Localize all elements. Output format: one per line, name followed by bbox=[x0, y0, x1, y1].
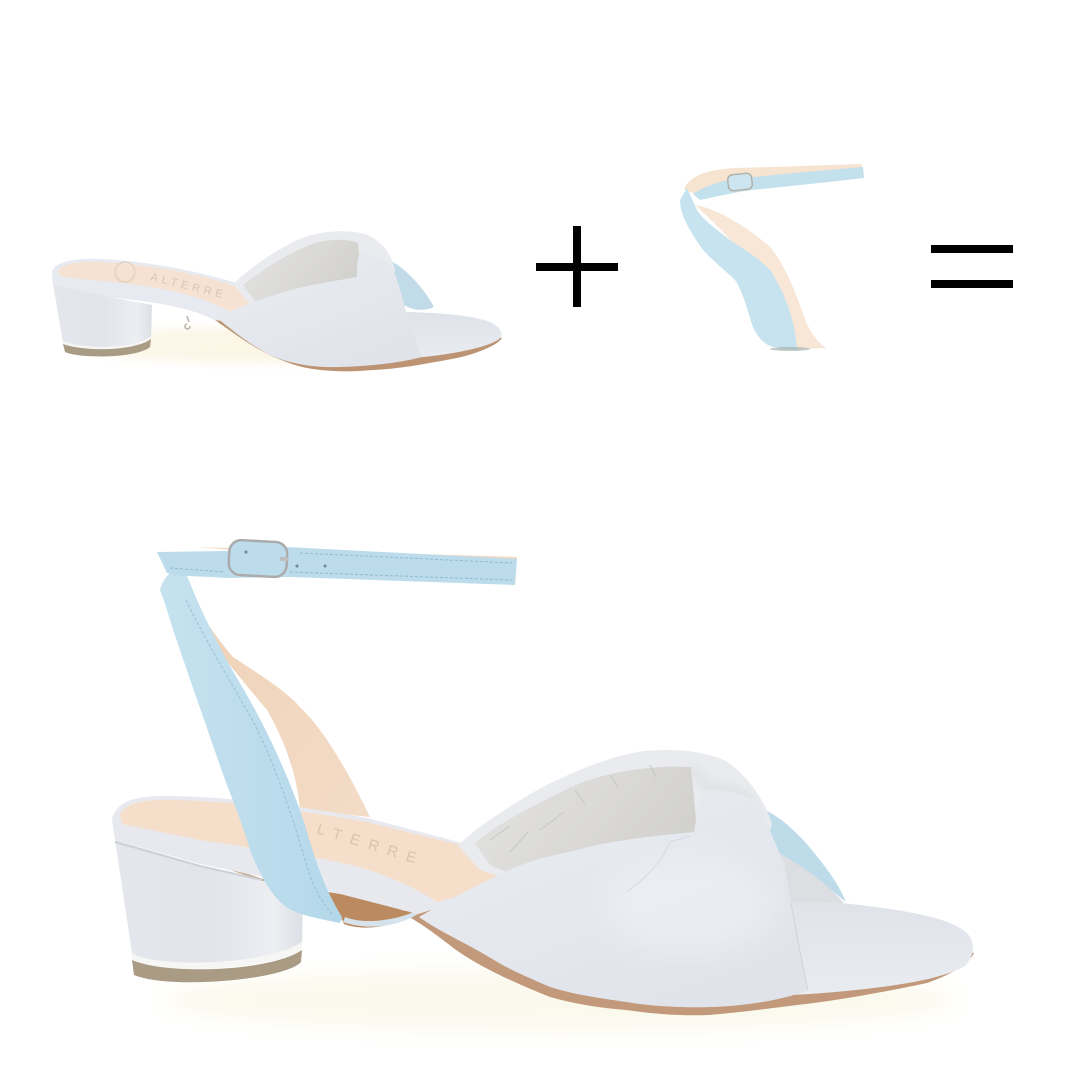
lining interior bbox=[243, 240, 362, 305]
small ankle strap piece bbox=[680, 164, 864, 351]
blue vertical strap bbox=[160, 568, 342, 923]
toe footbed bbox=[395, 312, 502, 360]
ground shadow bbox=[160, 968, 960, 1032]
heel underside edge bbox=[212, 863, 310, 880]
strap buckle bbox=[727, 173, 753, 191]
buckle bbox=[228, 540, 325, 578]
platform band bbox=[52, 259, 300, 325]
ground shadow bbox=[80, 327, 460, 363]
equation: equals sign bbox=[931, 245, 1013, 288]
insole bbox=[120, 800, 540, 902]
knot shading on rim bbox=[691, 767, 752, 800]
strap body bbox=[680, 188, 797, 350]
heel tip bbox=[132, 950, 302, 982]
heel block bbox=[115, 840, 303, 964]
sole bbox=[110, 296, 502, 371]
platform band bbox=[112, 796, 480, 914]
lining interior bbox=[475, 767, 698, 880]
heel block bbox=[53, 284, 152, 349]
vamp seam bbox=[791, 903, 808, 990]
vamp bbox=[217, 253, 422, 367]
pin bbox=[185, 316, 190, 329]
insole logo and brand bbox=[115, 262, 228, 302]
strap stitching bbox=[186, 600, 332, 914]
toe footbed bbox=[775, 895, 973, 995]
vamp highlight bbox=[605, 855, 775, 955]
ankle strap bbox=[157, 547, 517, 585]
insole brand: LTERRE bbox=[315, 821, 427, 870]
vamp bbox=[419, 790, 808, 1007]
back peach strap lining bbox=[184, 594, 370, 817]
insole logo and brand: ALTERRE bbox=[149, 271, 228, 302]
vamp crease bbox=[628, 836, 690, 891]
insole bbox=[58, 262, 290, 318]
outsole under arch bbox=[328, 892, 414, 928]
lining wrinkles bbox=[490, 765, 656, 852]
blue twist bbox=[755, 805, 846, 902]
strap stitches bbox=[170, 553, 512, 580]
large sandal with blue strap bbox=[112, 540, 974, 1032]
small sandal: slide without strap bbox=[52, 231, 502, 371]
grey fold beneath twist bbox=[770, 848, 844, 903]
sole bbox=[400, 900, 974, 1015]
strap back peach tip bbox=[198, 547, 517, 561]
blue twist bbox=[385, 258, 434, 310]
band groove line bbox=[115, 842, 262, 880]
base shadow bbox=[770, 347, 810, 351]
lining rim bbox=[233, 231, 395, 310]
lining rim bbox=[458, 750, 772, 885]
equation: plus sign bbox=[536, 226, 618, 307]
strap lining bbox=[684, 164, 863, 196]
